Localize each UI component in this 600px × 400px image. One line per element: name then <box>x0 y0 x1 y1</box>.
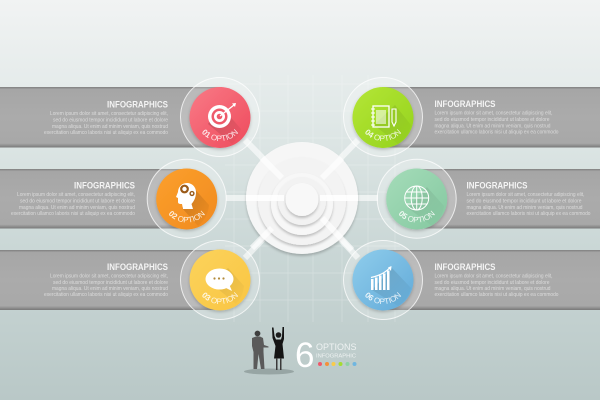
text block: row 3 right: Lorem ipsum dolor sit amet, consectetur adipiscing elit, <box>434 274 552 280</box>
coloured disc <box>190 250 250 310</box>
option label: 02 OPTION <box>169 210 205 222</box>
panel: option 05 <box>376 158 457 239</box>
heading: options infographic: INFOGRAPHIC <box>316 354 356 360</box>
band: row 2 left <box>0 169 190 228</box>
band: row 3 right <box>382 250 600 310</box>
text block: row 2 left: exercitation ullamco laboris nisi ut aliquip ex ea commodo <box>11 211 135 217</box>
text block: row 2 left: sed do eiusmod tempor incididunt ut labore et dolore <box>20 198 135 204</box>
coloured disc <box>190 87 250 148</box>
legend: coloured dots <box>318 362 356 366</box>
background grid <box>225 75 400 322</box>
coloured disc <box>352 250 414 310</box>
text block: row 1 right: sed do eiusmod tempor incididunt ut labore et dolore <box>434 117 550 123</box>
icon: target <box>208 103 241 144</box>
icon: business people silhouettes <box>244 327 294 374</box>
option label: 03 OPTION <box>202 292 238 304</box>
option label: 05 OPTION <box>399 210 435 222</box>
text block: row 3 left <box>44 262 168 298</box>
text block: row 1 right: Lorem ipsum dolor sit amet, consectetur adipiscing elit, <box>434 110 552 116</box>
glass ring <box>344 240 422 320</box>
glass ring <box>180 240 260 320</box>
text block: row 1 right: exercitation ullamco laboris nisi ut aliquip ex ea commodo <box>434 130 559 136</box>
glass ring <box>180 78 260 156</box>
text block: row 2 left <box>11 180 135 217</box>
big numeral 6: 6 <box>295 336 314 375</box>
icon: speech bubble <box>206 268 244 304</box>
text block: row 3 right: exercitation ullamco laboris nisi ut aliquip ex ea commodo <box>434 292 559 298</box>
text block: row 3 right: sed do eiusmod tempor incididunt ut labore et dolore <box>434 280 550 286</box>
panel: option 03 <box>180 240 260 320</box>
text block: row 3 left: magna aliqua. Ut enim ad minim veniam, quis nostrud <box>52 286 168 292</box>
glass ring <box>377 159 456 238</box>
coloured disc <box>352 87 414 148</box>
text block: row 2 left: INFOGRAPHICS <box>74 180 135 190</box>
text block: row 2 right <box>466 180 591 217</box>
text block: row 3 right: INFOGRAPHICS <box>434 262 496 272</box>
text block: row 2 right: exercitation ullamco laboris nisi ut aliquip ex ea commodo <box>466 211 591 217</box>
panel: option 06 <box>343 240 423 320</box>
text block: row 1 left: INFOGRAPHICS <box>107 100 168 110</box>
text block: row 3 right <box>434 262 559 298</box>
panel: option 04 <box>343 77 423 157</box>
text block: row 2 left: Lorem ipsum dolor sit amet, consectetur adipiscing elit, <box>17 192 135 198</box>
text block: row 1 right: INFOGRAPHICS <box>434 99 496 109</box>
option label: 01 OPTION <box>202 129 238 141</box>
panel: option 02 <box>146 158 226 239</box>
panel: option 01 <box>180 77 260 157</box>
text block: row 2 right: sed do eiusmod tempor incididunt ut labore et dolore <box>466 198 582 204</box>
icon: notebook and pencil <box>371 105 411 144</box>
heading: options infographic: OPTIONS <box>316 342 356 352</box>
connector spokes <box>226 140 378 258</box>
text block: row 1 right <box>434 99 559 136</box>
band: row 1 right <box>382 87 600 148</box>
text block: row 1 left <box>44 100 168 136</box>
text block: row 1 left: exercitation ullamco laboris nisi ut aliquip ex ea commodo <box>44 130 168 136</box>
icon: rising bar chart <box>371 266 411 306</box>
icon: head with gears <box>176 183 209 226</box>
central concentric discs <box>246 142 358 254</box>
text block: row 2 left: magna aliqua. Ut enim ad minim veniam, quis nostrud <box>19 205 135 211</box>
text block: row 3 right: magna aliqua. Ut enim ad minim veniam, quis nostrud <box>434 286 551 292</box>
icon: globe <box>405 186 444 226</box>
heading: options infographic <box>316 342 356 360</box>
text block: row 2 right: magna aliqua. Ut enim ad minim veniam, quis nostrud <box>466 205 583 211</box>
text block: row 1 right: magna aliqua. Ut enim ad minim veniam, quis nostrud <box>434 123 551 129</box>
band: row 2 right <box>416 169 600 228</box>
band: row 3 left <box>0 250 222 310</box>
band: row 1 left <box>0 87 222 148</box>
coloured disc <box>386 168 447 230</box>
text block: row 3 left: exercitation ullamco laboris nisi ut aliquip ex ea commodo <box>44 292 168 298</box>
text block: row 3 left: INFOGRAPHICS <box>107 262 168 272</box>
text block: row 1 left: sed do eiusmod tempor incididunt ut labore et dolore <box>53 118 168 124</box>
glass ring <box>147 159 226 238</box>
coloured disc <box>156 168 217 230</box>
text block: row 3 left: Lorem ipsum dolor sit amet, consectetur adipiscing elit, <box>50 274 168 280</box>
text block: row 1 left: magna aliqua. Ut enim ad minim veniam, quis nostrud <box>52 124 168 130</box>
text block: row 2 right: INFOGRAPHICS <box>466 180 528 190</box>
text block: row 2 right: Lorem ipsum dolor sit amet, consectetur adipiscing elit, <box>466 192 584 198</box>
option label: 06 OPTION <box>365 292 402 304</box>
option label: 04 OPTION <box>365 129 402 141</box>
text block: row 3 left: sed do eiusmod tempor incididunt ut labore et dolore <box>53 280 168 286</box>
glass ring <box>344 78 422 156</box>
text block: row 1 left: Lorem ipsum dolor sit amet, consectetur adipiscing elit, <box>50 111 168 117</box>
